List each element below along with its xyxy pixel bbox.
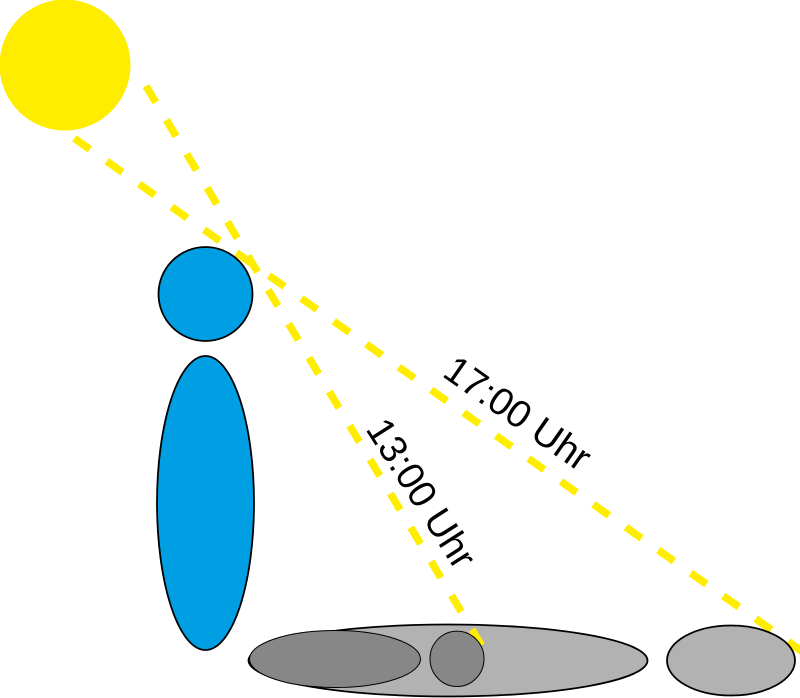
sun <box>0 0 130 130</box>
label: 13:00 Uhr: 13:00 Uhr <box>357 411 485 577</box>
head shadow 17:00 <box>667 626 795 696</box>
person body <box>157 356 254 650</box>
long shadow 13:00 body <box>248 624 648 696</box>
sun ray: 17:00 <box>74 138 800 655</box>
label: 17:00 Uhr: 17:00 Uhr <box>436 348 599 480</box>
person head <box>158 247 252 341</box>
head shadow 13:00 <box>430 631 484 686</box>
dark shadow ellipse <box>250 630 420 688</box>
sun ray: 13:00 <box>146 86 482 646</box>
